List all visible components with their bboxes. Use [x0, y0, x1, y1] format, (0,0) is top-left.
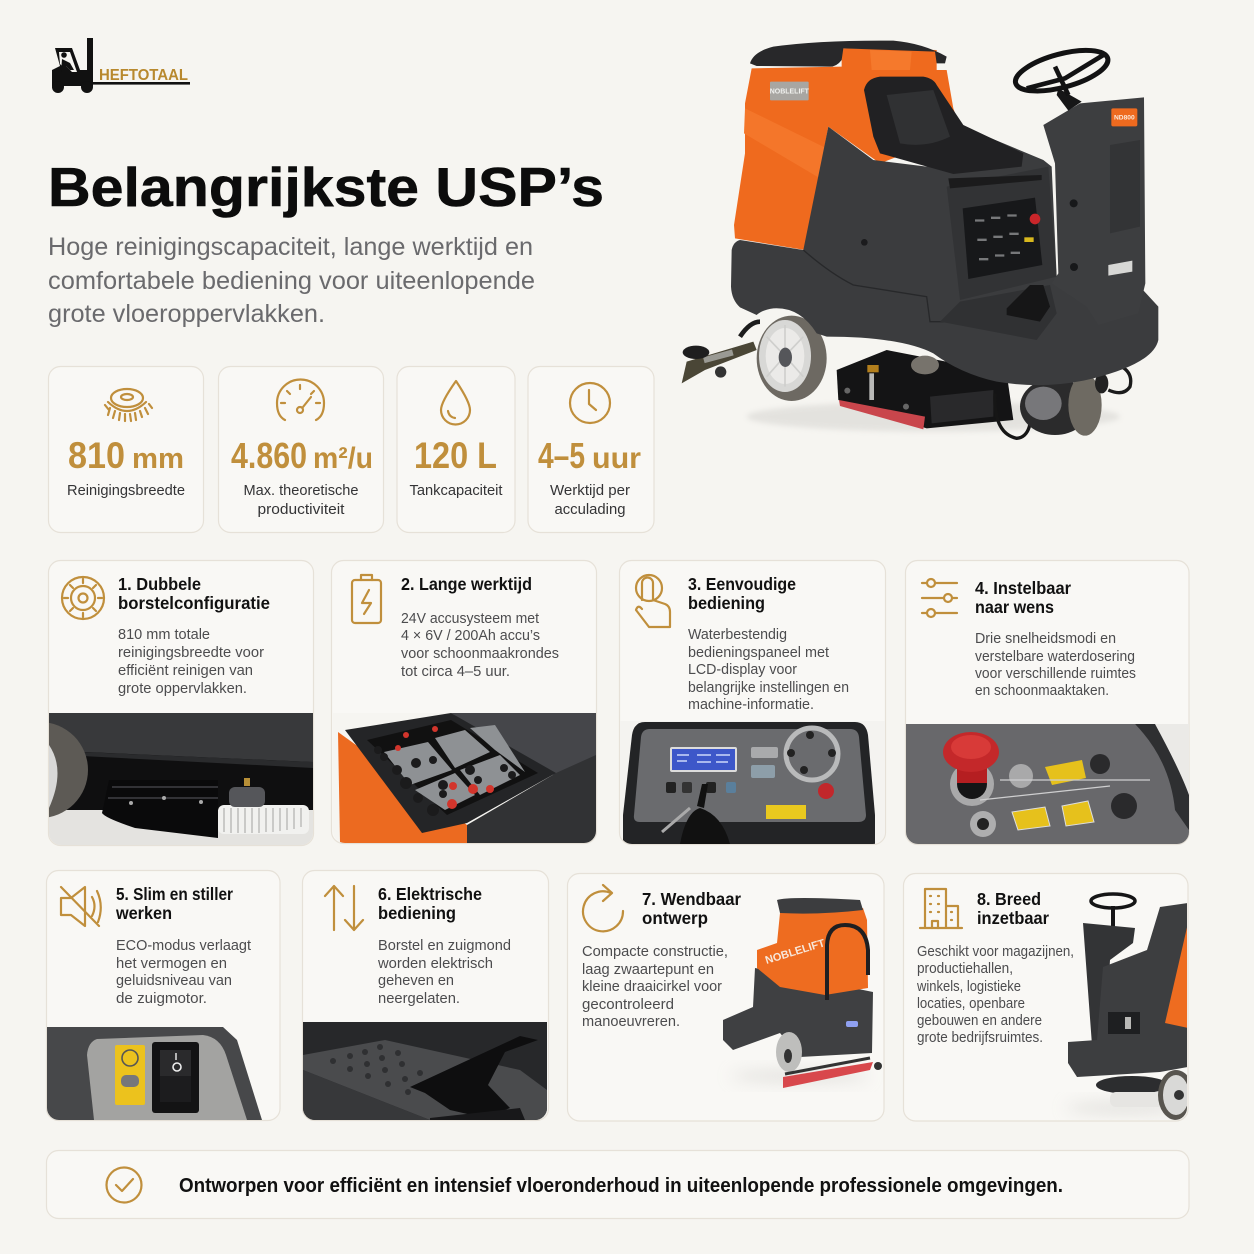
- stat card: reinigingsbreedte: Reinigingsbreedte: [67, 482, 185, 499]
- brush deck: [837, 350, 1013, 429]
- body text: Waterbestendig: [688, 627, 787, 643]
- stat card: werktijd: uur: [592, 442, 641, 475]
- subtitle: [48, 233, 535, 328]
- icon: check circle: [106, 1168, 142, 1202]
- body text: laag zwaartepunt en: [582, 962, 714, 978]
- heading: bediening: [378, 903, 456, 923]
- stat card: reinigingsbreedte: 810: [68, 435, 125, 476]
- stat card: productiviteit: Max. theoretische: [244, 482, 358, 499]
- steering column: ND800: [1114, 114, 1135, 121]
- subtitle: comfortabele bediening voor uiteenlopende: [48, 267, 535, 295]
- heading: werken: [115, 903, 172, 923]
- body text: Drie snelheidsmodi en: [975, 631, 1116, 647]
- callout: bottom statement: [46, 1150, 1189, 1218]
- stat card: productiviteit: [218, 366, 384, 532]
- subtitle: grote vloeroppervlakken.: [48, 300, 325, 328]
- body text: [582, 944, 728, 1030]
- photo: emergency button: [906, 724, 1189, 844]
- stat card: productiviteit: productiviteit: [258, 501, 345, 518]
- heading: 7. Wendbaar: [642, 889, 741, 909]
- body text: Compacte constructie,: [582, 944, 728, 960]
- photo: machine rear: [723, 898, 882, 1088]
- icon: brush: [105, 389, 152, 421]
- body text: machine-informatie.: [688, 697, 814, 713]
- photo: batteries: [333, 713, 596, 843]
- photo: control panel: [620, 721, 885, 844]
- body text: worden elektrisch: [377, 956, 493, 972]
- body text: 810 mm totale: [118, 627, 210, 643]
- icon: sliders: [922, 579, 957, 617]
- photo: machine side: [1065, 894, 1194, 1120]
- body text: reinigingsbreedte voor: [118, 645, 264, 661]
- icon: up down arrows: [325, 886, 363, 930]
- body text: kleine draaicirkel voor: [582, 979, 722, 995]
- heading: bediening: [688, 593, 765, 613]
- side control panel: [861, 198, 1042, 279]
- stat card: tankcapaciteit: Tankcapaciteit: [410, 482, 503, 499]
- lid: [750, 41, 947, 67]
- body text: productiehallen,: [917, 961, 1013, 977]
- heading: 8. Breed: [977, 889, 1041, 909]
- heading: [378, 884, 482, 923]
- heading: 1. Dubbele: [118, 574, 201, 594]
- logo: Heftotaal forklift: HEFTOTAAL: [99, 67, 188, 84]
- heading: 5. Slim en stiller: [116, 884, 233, 904]
- icon: buildings: [920, 889, 962, 928]
- rear wheel: [757, 316, 827, 401]
- body text: grote oppervlakken.: [118, 681, 247, 697]
- body text: voor schoonmaakrondes: [401, 646, 559, 662]
- steering wheel: [1011, 42, 1112, 111]
- body text: ECO-modus verlaagt: [116, 938, 251, 954]
- icon: rotate arrow: [583, 885, 623, 931]
- body text: het vermogen en: [116, 956, 227, 972]
- stat card: tankcapaciteit: [397, 366, 515, 532]
- photo: machine rear: NOBLELIFT: [764, 937, 827, 967]
- step and pedal: [940, 285, 1057, 340]
- icon: gauge: [277, 379, 324, 420]
- body text: [118, 627, 264, 697]
- body text: [116, 938, 251, 1007]
- stat card: tankcapaciteit: 120 L: [414, 435, 497, 476]
- heading: 4. Instelbaar: [975, 578, 1071, 598]
- body text: [688, 627, 849, 713]
- body text: verstelbare waterdosering: [975, 649, 1135, 665]
- icon: muted speaker: [61, 887, 101, 926]
- body text: de zuigmotor.: [116, 991, 207, 1007]
- body text: LCD-display voor: [688, 662, 797, 678]
- stat card: werktijd: [528, 366, 654, 532]
- body text: winkels, logistieke: [916, 979, 1021, 995]
- heading: [977, 889, 1049, 928]
- orange tank: NOBLELIFT: [770, 89, 810, 96]
- machine body: [731, 127, 1158, 385]
- body text: locaties, openbare: [917, 996, 1025, 1012]
- squeegee assembly: [682, 322, 760, 383]
- stat card: productiviteit: 4.860: [231, 435, 307, 476]
- stat card: werktijd: Werktijd per: [550, 482, 630, 499]
- body text: 24V accusysteem met: [401, 611, 539, 627]
- body text: bedieningspaneel met: [688, 645, 829, 661]
- heading: 3. Eenvoudige: [688, 574, 796, 594]
- body text: geheven en: [378, 973, 454, 989]
- body text: 4 × 6V / 200Ah accu’s: [401, 628, 540, 644]
- stat card: reinigingsbreedte: mm: [132, 443, 184, 475]
- panel: 4 instelbaar naar wens: [906, 560, 1189, 844]
- body text: voor verschillende ruimtes: [975, 666, 1136, 682]
- callout: bottom statement: Ontworpen voor efficiënt en intensief vloeronderhoud in uiteenlopende professionele omgevingen.: [179, 1175, 1063, 1197]
- body text: Geschikt voor magazijnen,: [917, 944, 1074, 960]
- front wheel and hose: [995, 367, 1131, 438]
- hero machine image: [682, 41, 1158, 438]
- body text: gecontroleerd: [582, 997, 674, 1013]
- panel: 1 dubbele borstelconfiguratie: [48, 560, 314, 846]
- body text: [401, 611, 559, 680]
- panel: 8 breed inzetbaar: [904, 874, 1194, 1121]
- body text: [377, 938, 511, 1007]
- stat card: productiviteit: m²/u: [313, 442, 373, 475]
- body text: en schoonmaaktaken.: [975, 683, 1109, 699]
- heading: borstelconfiguratie: [118, 593, 270, 613]
- title: Belangrijkste USP’s: [48, 156, 604, 218]
- body text: efficiënt reinigen van: [118, 663, 253, 679]
- heading: [115, 884, 233, 923]
- panel: 7 wendbaar ontwerp: [568, 874, 884, 1121]
- stat card: werktijd: acculading: [554, 501, 626, 518]
- heading: 6. Elektrische: [378, 884, 482, 904]
- photo: foot pedal: [303, 1022, 547, 1120]
- heading: ontwerp: [642, 908, 708, 928]
- photo: eco switch: [47, 1027, 262, 1120]
- heading: inzetbaar: [977, 908, 1049, 928]
- icon: clock: [570, 383, 610, 423]
- stat card: werktijd: 4–5: [538, 435, 585, 476]
- steering column: [1043, 97, 1145, 325]
- icon: battery: [352, 575, 381, 623]
- panel: 6 elektrische bediening: [302, 870, 548, 1120]
- body text: manoeuvreren.: [582, 1014, 680, 1030]
- logo: Heftotaal forklift: [52, 38, 190, 93]
- heading: [688, 574, 796, 613]
- seat: [864, 77, 1042, 188]
- heading: [975, 578, 1071, 617]
- panel: 3 eenvoudige bediening: [620, 560, 886, 844]
- icon: touch hand: [636, 575, 670, 627]
- orange tank: [734, 48, 962, 250]
- stat card: reinigingsbreedte: [48, 366, 204, 532]
- body text: geluidsniveau van: [116, 973, 232, 989]
- body text: neergelaten.: [378, 991, 460, 1007]
- body text: grote bedrijfsruimtes.: [917, 1030, 1043, 1046]
- photo: brush deck: [49, 713, 313, 845]
- heading: 2. Lange werktijd: [401, 574, 532, 594]
- heading: [118, 574, 270, 613]
- subtitle: Hoge reinigingscapaciteit, lange werktijd en: [48, 233, 533, 261]
- body text: tot circa 4–5 uur.: [401, 664, 510, 680]
- icon: brush target: [62, 577, 104, 619]
- heading: [642, 889, 741, 928]
- panel: 2 lange werktijd: [332, 560, 596, 844]
- body text: [975, 631, 1136, 699]
- body text: belangrijke instellingen en: [688, 680, 849, 696]
- icon: drop: [441, 381, 470, 424]
- body text: [916, 944, 1074, 1046]
- body text: gebouwen en andere: [917, 1013, 1042, 1029]
- body text: Borstel en zuigmond: [378, 938, 511, 954]
- heading: naar wens: [975, 597, 1054, 617]
- panel: 5 slim en stiller werken: [46, 870, 280, 1120]
